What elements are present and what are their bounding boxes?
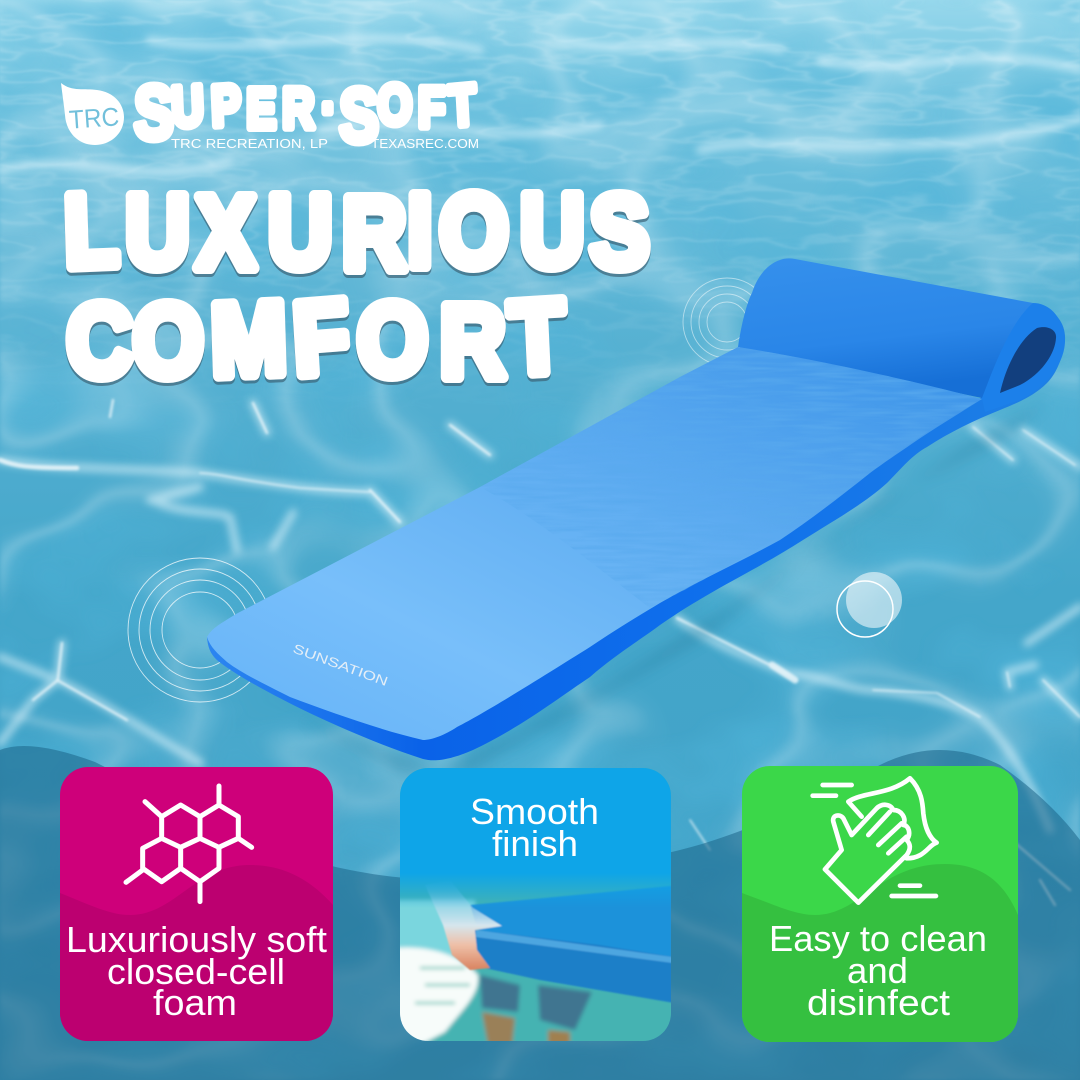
panel: closed-cell foam: [60, 767, 333, 1041]
panel caption: [470, 791, 599, 864]
brand mark on the mat: SUNSATION: [291, 641, 390, 689]
logo drop mark: TRC: [68, 101, 120, 135]
logo wordmark: S: [134, 71, 174, 156]
panel wave: [60, 865, 333, 1041]
panel caption: [66, 919, 327, 1023]
pillow roll: [738, 258, 1033, 398]
panel caption: and: [847, 950, 908, 991]
logo company line: TRC RECREATION, LP: [171, 136, 328, 151]
panel caption: disinfect: [807, 982, 950, 1023]
panel caption: foam: [153, 982, 237, 1023]
logo wordmark: UPER·: [170, 73, 336, 140]
logo website: TEXASREC.COM: [371, 136, 479, 151]
panel: easy to clean: [742, 766, 1018, 1042]
mat top surface: [207, 347, 982, 740]
panel caption: Luxuriously soft: [66, 919, 327, 960]
logo: TRC Super-Soft: [61, 71, 479, 159]
pillow end with opening: [982, 303, 1065, 412]
logo wordmark: S: [339, 74, 379, 159]
pillow opening: [1000, 327, 1056, 393]
mat side edge: [207, 305, 1065, 760]
logo drop mark: [61, 83, 124, 145]
title: [63, 173, 649, 399]
icon: hand wiping with cloth: [813, 778, 937, 903]
icon: honeycomb molecule: [126, 786, 252, 902]
panel: smooth finish: [400, 768, 671, 1041]
decorative bubble: [837, 572, 902, 637]
mat shadow: [300, 400, 1050, 770]
decorative ripple rings, lower left: [128, 558, 272, 702]
panel caption: closed-cell: [107, 951, 285, 992]
panel caption: [769, 918, 987, 1023]
dark wave band at the bottom: [0, 746, 1080, 1080]
logo wordmark: OFT: [378, 72, 478, 139]
title line 2: COMFORT: [67, 277, 568, 399]
panel caption: finish: [492, 823, 578, 864]
panel caption: Easy to clean: [769, 918, 987, 959]
decorative ripple rings, by the pillow: [683, 278, 771, 366]
product: blue foam pool float: [207, 258, 1065, 770]
panel photo: hand lifting mat edge: [400, 768, 671, 1041]
title line 1: LUXURIOUS: [63, 173, 649, 292]
panel wave: [742, 864, 1018, 1042]
panel caption: Smooth: [470, 791, 599, 832]
